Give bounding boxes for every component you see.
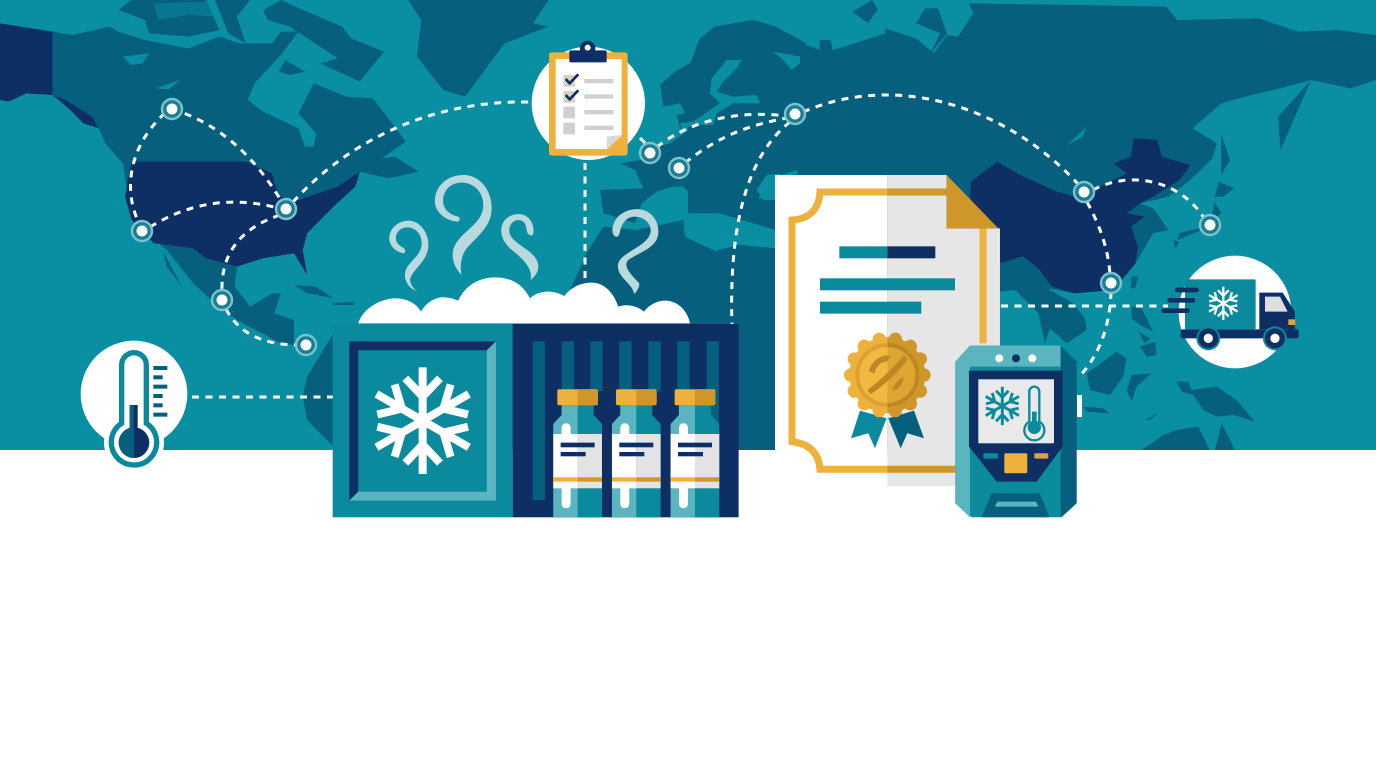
vaccine vial 2	[612, 389, 661, 517]
freezer container	[333, 175, 739, 517]
icon: delivery truck badge	[1161, 256, 1299, 368]
map: Africa	[560, 220, 775, 450]
infographic illustration	[0, 0, 1376, 518]
map: Europe	[600, 20, 820, 240]
container vent panel	[513, 324, 739, 517]
map: Southeast Asia and Oceania	[1000, 257, 1255, 450]
icon: thermometer badge	[81, 341, 187, 473]
vaccine vial 3	[671, 389, 719, 517]
map: China highlighted	[969, 138, 1190, 293]
white tab behind monitor	[1077, 395, 1082, 417]
map: Alaska highlighted	[0, 23, 99, 128]
icon: clipboard checklist	[532, 41, 645, 160]
map: United States highlighted	[125, 162, 360, 275]
certificate document	[775, 175, 1000, 486]
cold vapour cloud	[358, 277, 690, 323]
vaccine vial 1	[553, 389, 602, 517]
dashed routes	[131, 95, 1204, 397]
handheld temperature monitor	[955, 346, 1077, 517]
map: Asia	[688, 0, 1376, 293]
certificate text lines	[820, 246, 955, 314]
world map background	[0, 0, 1376, 453]
route nodes	[132, 99, 1220, 355]
container door panel	[333, 324, 513, 517]
map: Baltic and Black Sea	[680, 52, 800, 200]
steam wisps	[389, 175, 658, 294]
map: North America	[53, 0, 548, 447]
certificate border	[792, 192, 983, 469]
approval seal with ribbons	[844, 333, 931, 448]
